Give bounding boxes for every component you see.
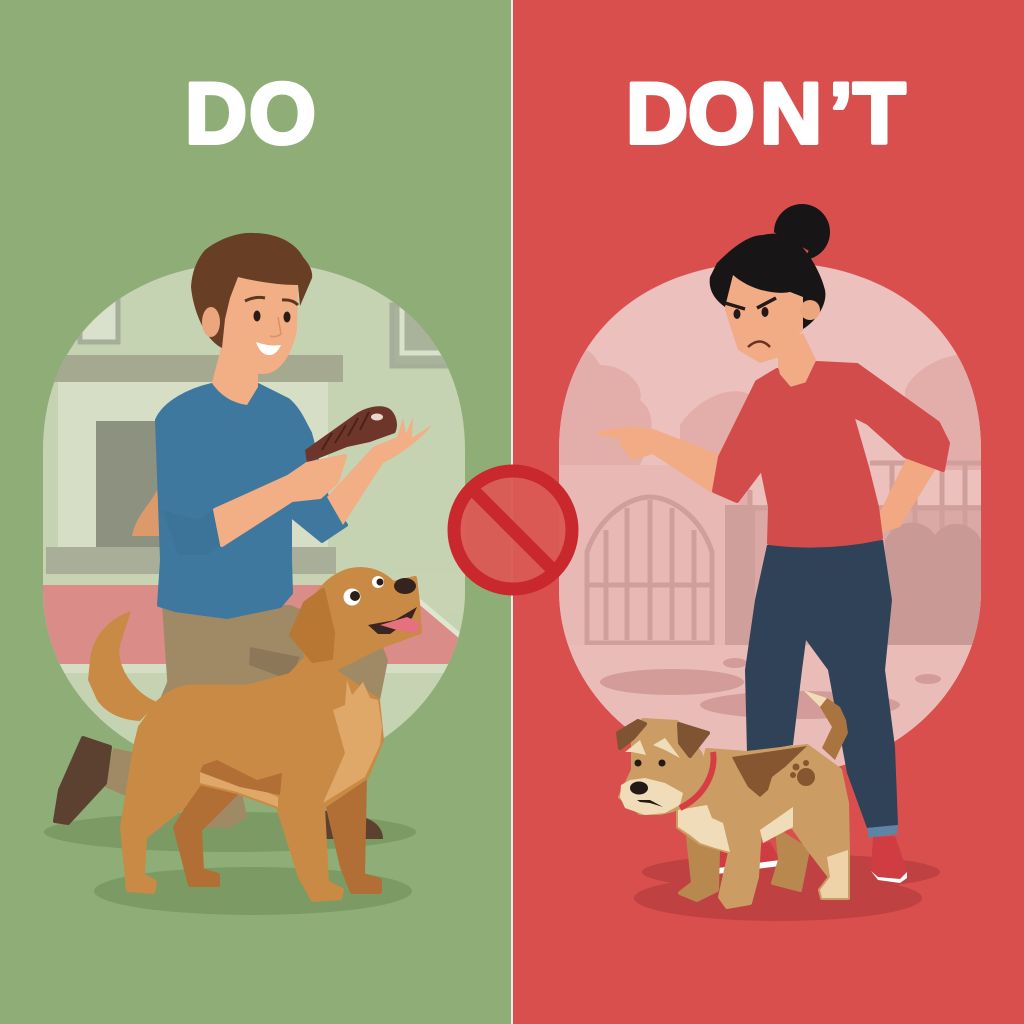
small dog belly fur: [760, 807, 793, 843]
dog chest fur: [323, 680, 382, 803]
panel: do background: [0, 0, 511, 1024]
small dog head: [620, 720, 710, 813]
small dog brown patch: [732, 746, 807, 797]
woman's arm, hand on hip: [840, 457, 935, 540]
man's torso: [157, 385, 346, 617]
woman's shoes: [717, 836, 907, 883]
illustration: man kneeling with treat: [55, 233, 432, 839]
small dog chest fur: [678, 805, 730, 852]
scene: living room: [43, 262, 465, 782]
illustration: angry woman pointing: [599, 204, 948, 883]
ground shadows: do: [44, 812, 416, 915]
woman's legs: [745, 540, 898, 838]
man's neck and head: [191, 233, 312, 405]
man's near arm and cuff: [163, 456, 345, 555]
divider: [511, 0, 513, 1024]
dog tail: [88, 611, 158, 721]
small dog collar: [680, 752, 713, 808]
heading: do: DO: [185, 66, 316, 162]
small dog body: [678, 746, 848, 907]
small dog tail: [803, 690, 848, 760]
illustration: golden dog: [88, 569, 420, 900]
man's far arm with open hand: [327, 417, 432, 525]
dog belly: [200, 770, 278, 807]
woman's pointing arm: [599, 428, 727, 491]
small dog muzzle: [620, 778, 683, 815]
small dog paw print: [790, 760, 815, 786]
small dog rear leg fur: [820, 850, 848, 898]
dog nose: [394, 578, 416, 594]
ground shadows: don't: [634, 854, 940, 921]
small dog brows: [625, 738, 680, 758]
panel: don't background: [513, 0, 1024, 1024]
steak treat: [305, 406, 397, 463]
illustration: scruffy dog: [618, 690, 848, 907]
small dog ears: [618, 721, 708, 756]
dog body: [122, 657, 382, 900]
woman's neck: [778, 333, 817, 387]
woman's shirt: [714, 363, 948, 546]
dog ear: [291, 590, 333, 661]
small dog face: [630, 760, 666, 807]
prohibition sign: [454, 471, 572, 589]
man's legs: [55, 605, 388, 839]
dog eyes: [344, 576, 384, 606]
dog head: [300, 569, 420, 670]
small dog far legs: [680, 830, 808, 900]
scene: yard with gate: [559, 262, 981, 785]
dog far legs: [175, 777, 380, 892]
woman's head: [710, 204, 830, 363]
heading: don't: DON’T: [626, 66, 906, 162]
dog mouth and tongue: [368, 607, 420, 634]
